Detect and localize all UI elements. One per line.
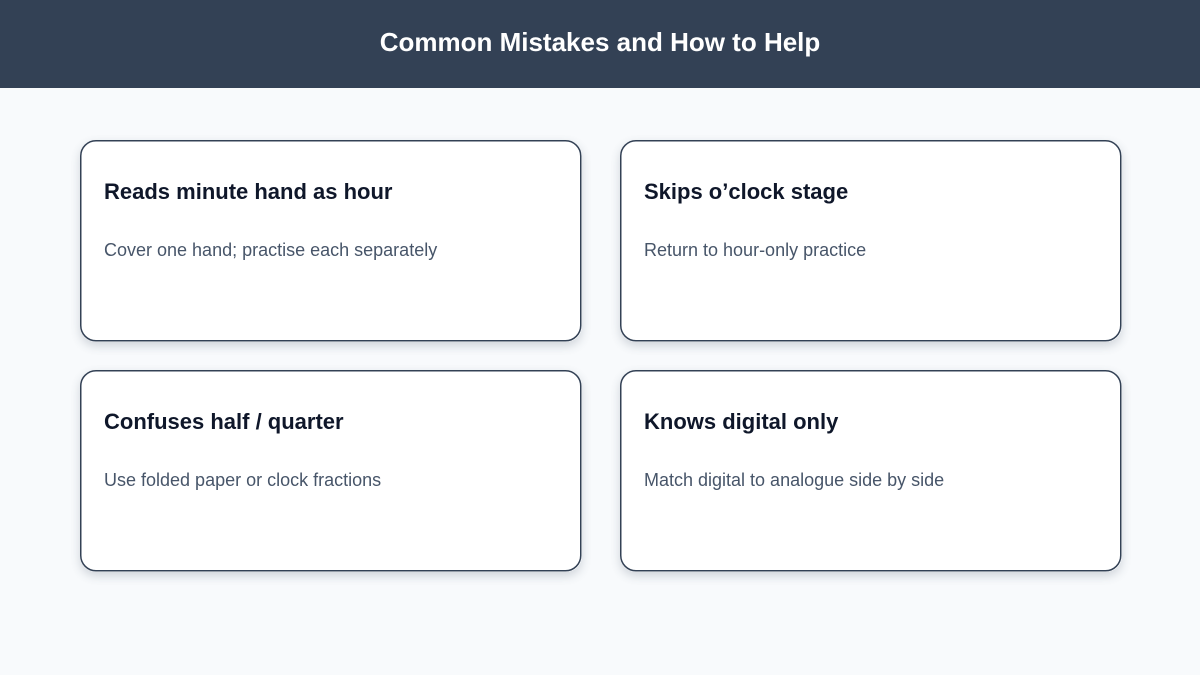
card text: half / quarter: Use folded paper or clock fractions	[104, 470, 381, 490]
card heading: half / quarter: Confuses half / quarter	[104, 409, 344, 434]
title: Common Mistakes and How to Help	[380, 27, 820, 57]
panel: confuses half / quarter	[80, 370, 582, 572]
card text: o'clock: Return to hour-only practice	[644, 240, 866, 260]
card text: minute hand: Cover one hand; practise each separately	[104, 240, 437, 260]
header banner	[0, 0, 1200, 88]
card heading: digital only: Knows digital only	[644, 409, 838, 434]
card heading: o'clock: Skips o’clock stage	[644, 179, 848, 204]
panel: knows digital only	[620, 370, 1122, 572]
card heading: minute hand: Reads minute hand as hour	[104, 179, 392, 204]
panel: reads minute hand as hour	[80, 140, 582, 342]
panel: skips o'clock stage	[620, 140, 1122, 342]
card text: digital only: Match digital to analogue side by side	[644, 470, 944, 490]
